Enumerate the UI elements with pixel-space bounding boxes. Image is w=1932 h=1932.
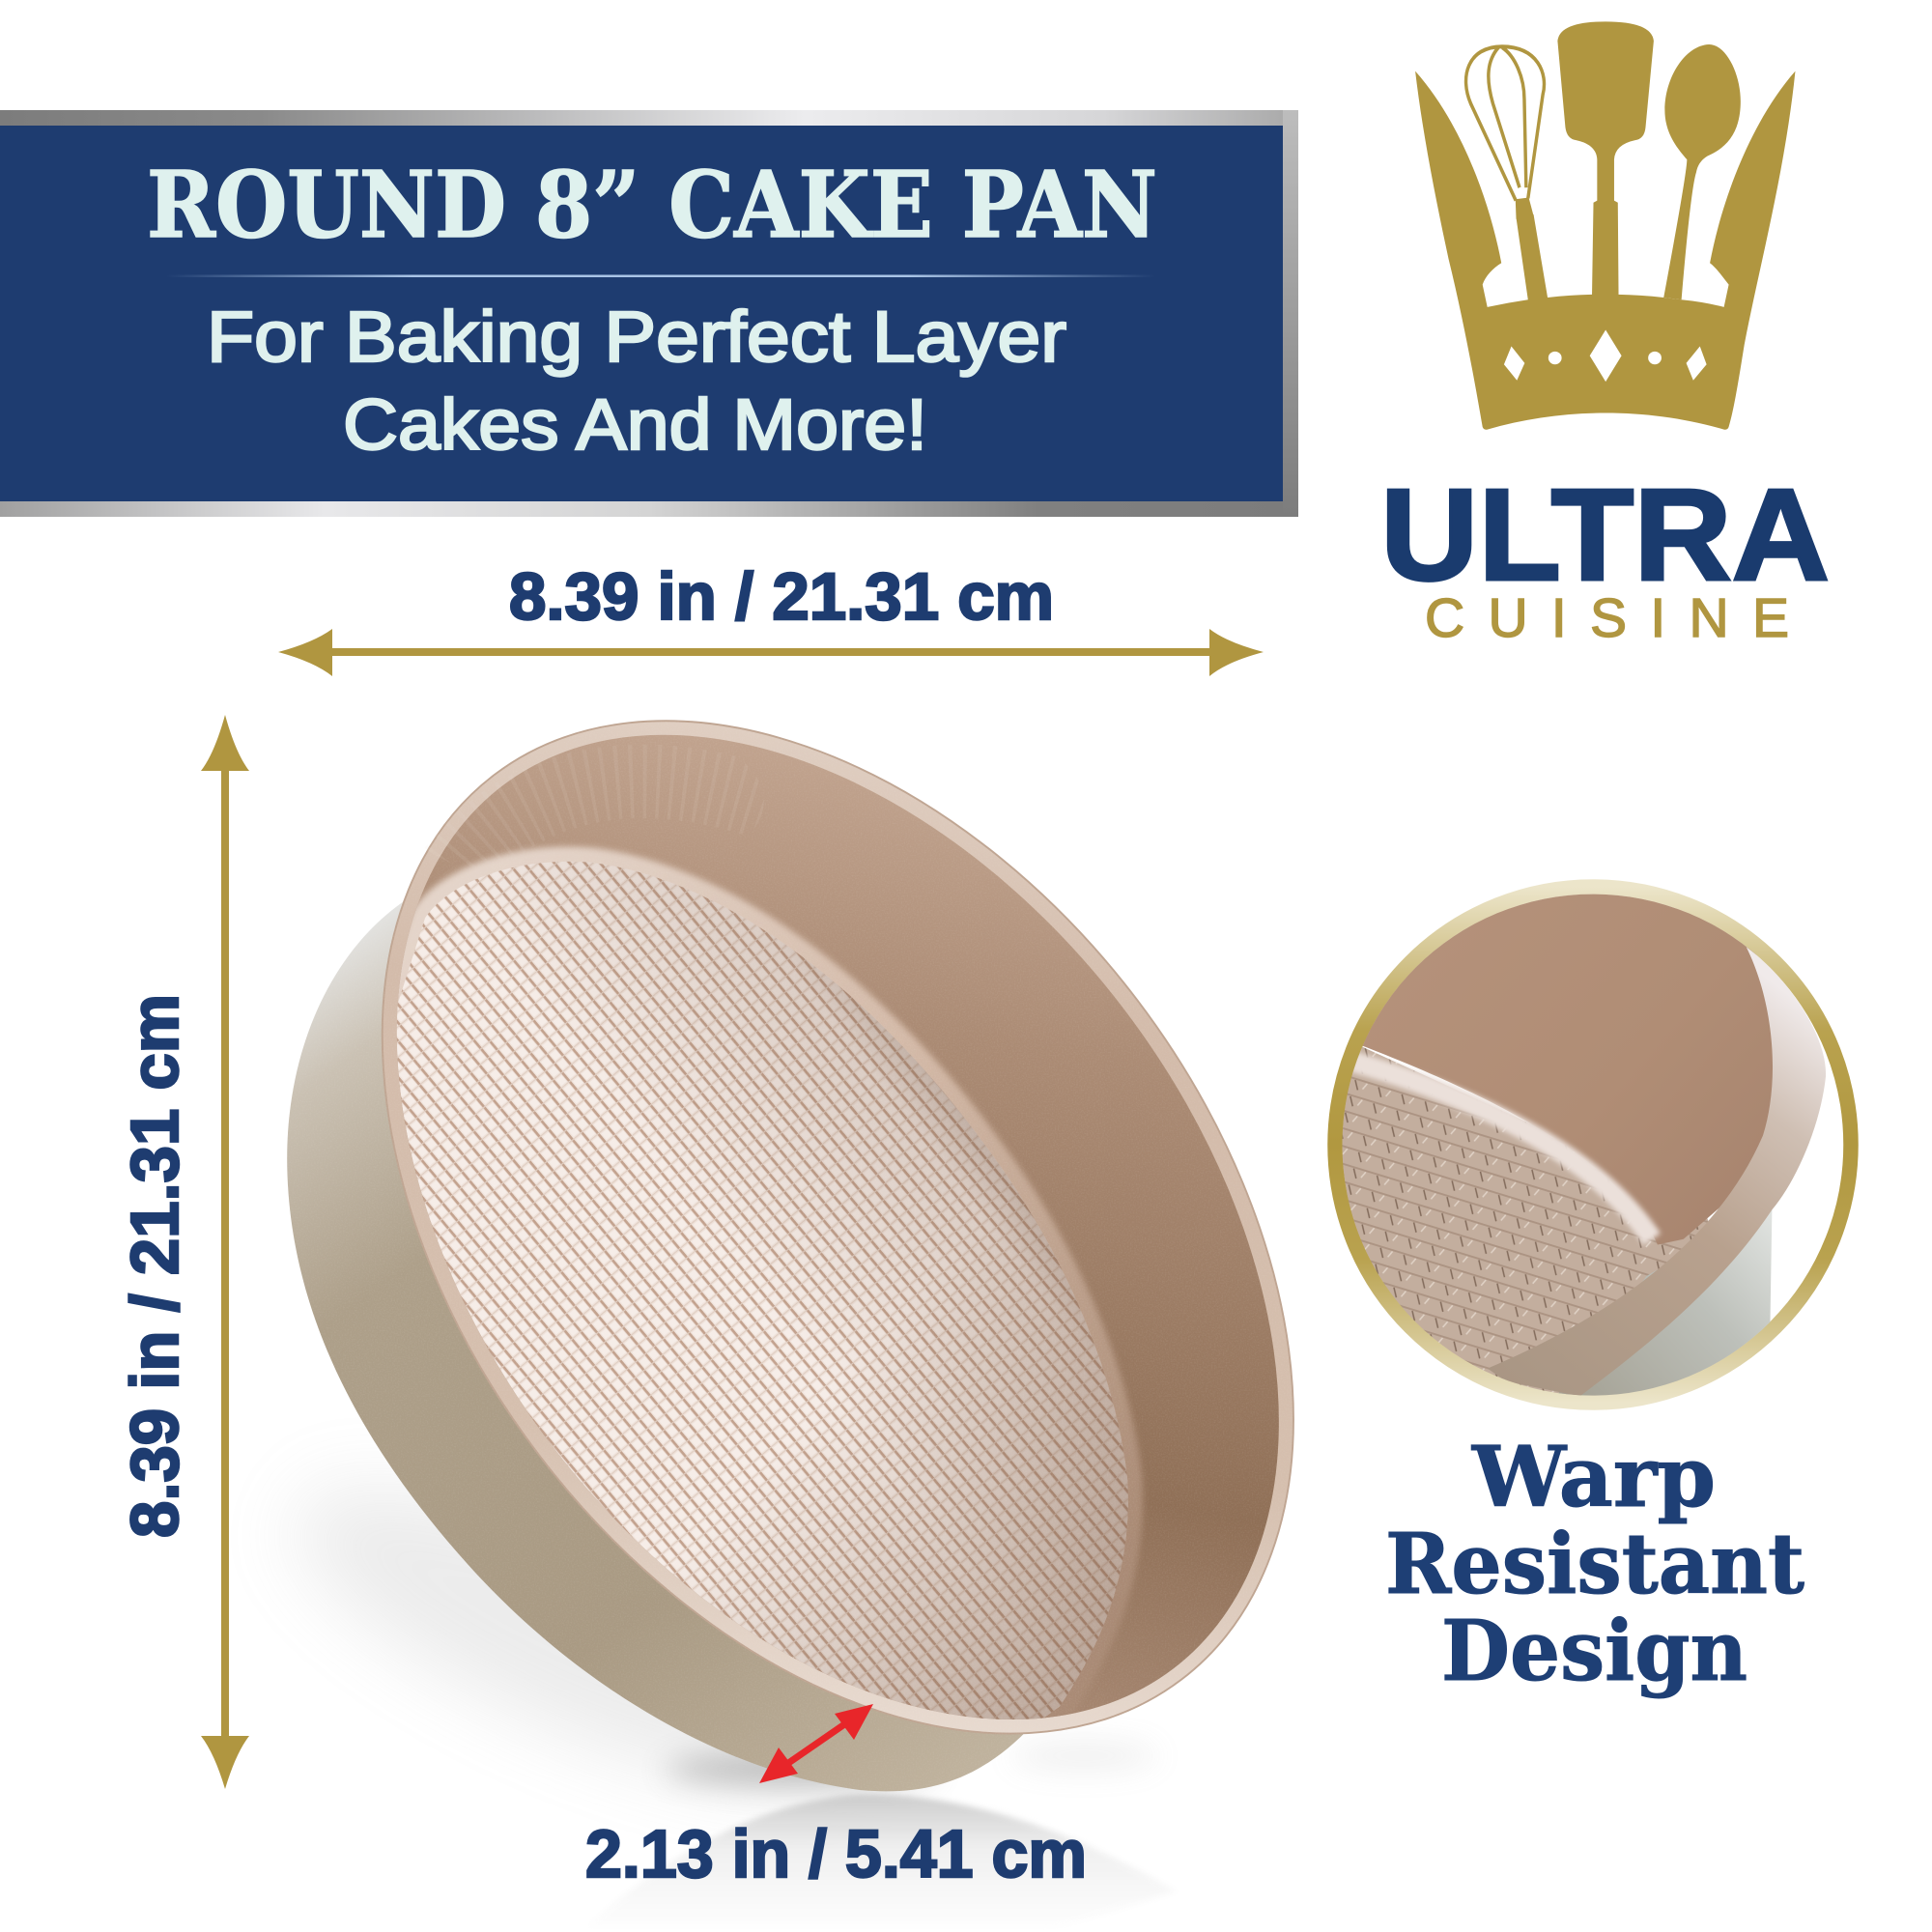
text: warp resistant design [1385, 1429, 1804, 1700]
subheading line 2: Cakes And More! [343, 384, 927, 465]
pan shadow [260, 1429, 1177, 1932]
arrow: pan depth [759, 1704, 873, 1783]
text: warp resistant design: Design [1441, 1603, 1747, 1700]
label: depth dimension: 2.13 in / 5.41 cm [585, 1816, 1087, 1891]
callout: zoomed pan detail [1314, 869, 1851, 1424]
pan inner wall [216, 568, 1460, 1887]
label: height dimension: 8.39 in / 21.31 cm [117, 994, 192, 1538]
pan outer wall [287, 899, 1033, 1791]
pan rim [195, 548, 1481, 1907]
gold ring [1335, 887, 1851, 1403]
arrow: height [201, 715, 249, 1789]
brand word: ULTRA: ULTRA [1380, 462, 1830, 608]
icon: crown of kitchen tools [1415, 21, 1795, 430]
textured pan floor [396, 843, 1145, 1719]
pan grain [375, 741, 1277, 1716]
heading: round cake pan: ROUND 8” CAKE PAN [147, 152, 1157, 259]
text: warp resistant design: Resistant [1385, 1516, 1804, 1613]
logo: Ultra Cuisine [1380, 21, 1830, 649]
text: warp resistant design: Warp [1471, 1429, 1716, 1526]
detail photo of pan corner [1343, 895, 1826, 1396]
illustration: round cake pan [195, 548, 1481, 1932]
brand word: CUISINE: CUISINE [1425, 587, 1789, 649]
label: width dimension: 8.39 in / 21.31 cm [509, 559, 1054, 634]
arrow: width [278, 629, 1264, 676]
subheading line 1: For Baking Perfect Layer [207, 297, 1066, 377]
panel: title banner [0, 110, 1298, 517]
wall ribs [440, 811, 566, 863]
